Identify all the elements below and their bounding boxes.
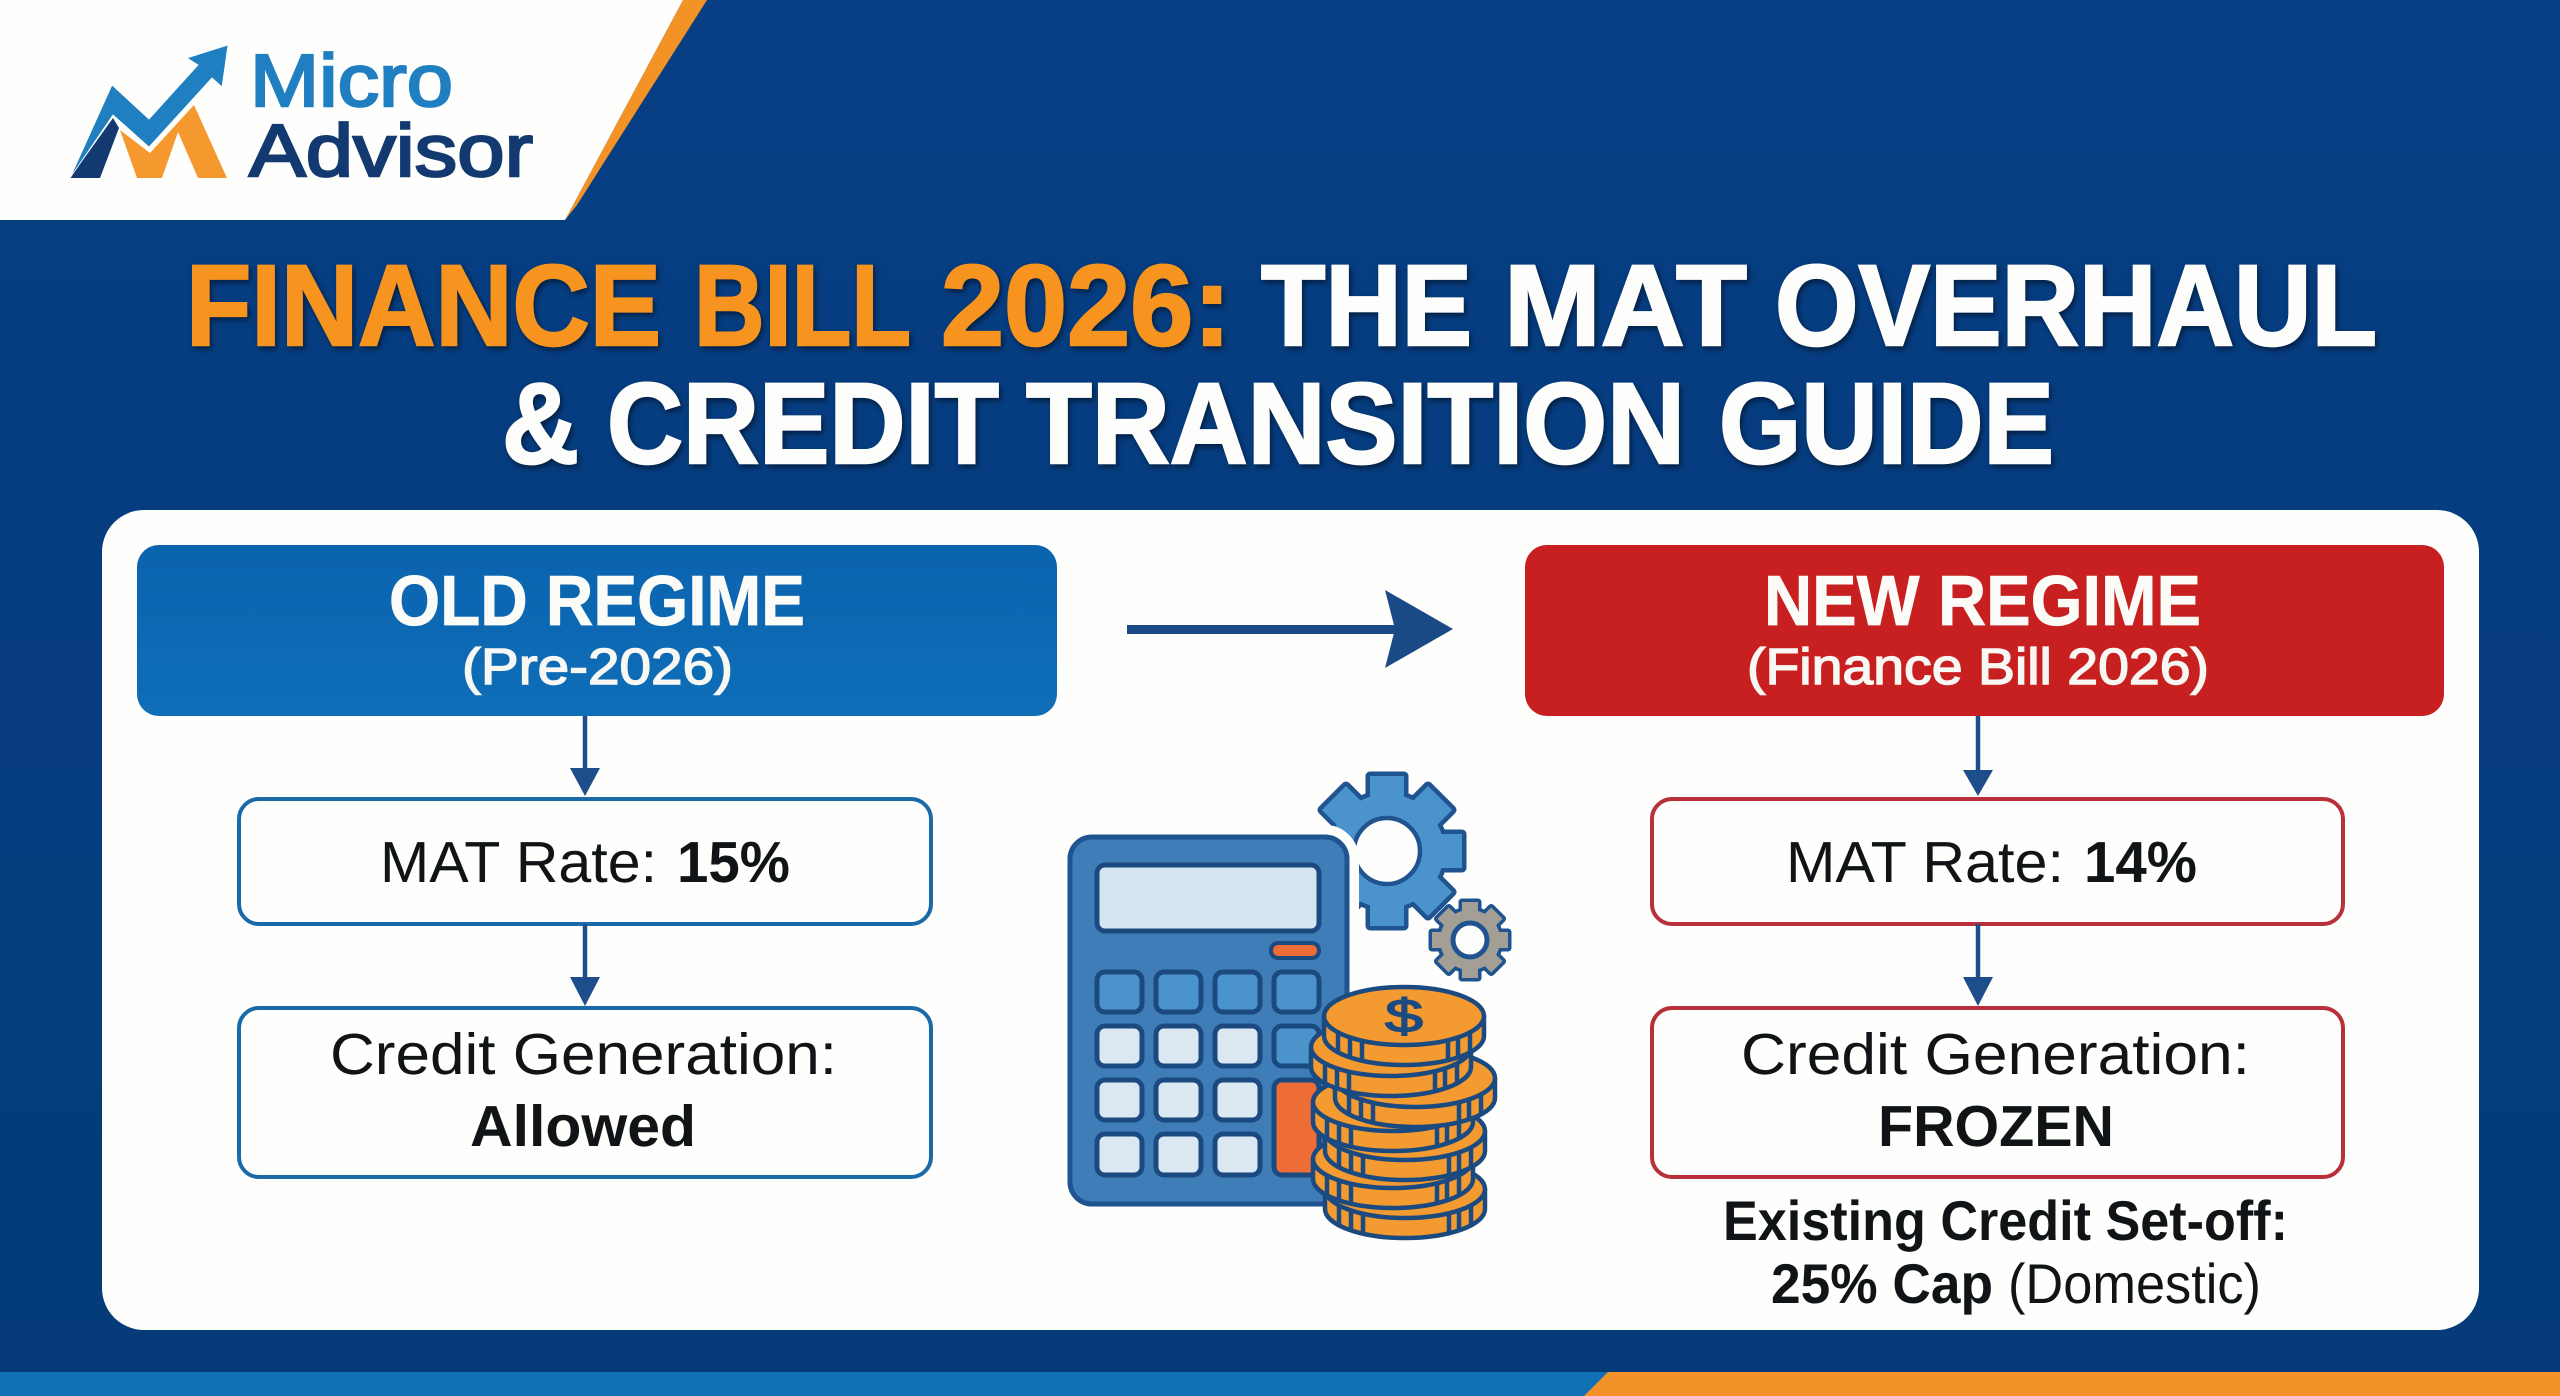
existing credit set-off note: (Domestic) — [2008, 1252, 2261, 1315]
existing credit set-off note: 25% Cap — [1771, 1252, 1993, 1315]
arrow: old regime to new regime — [1127, 590, 1453, 668]
credit generation box — [1652, 1008, 2343, 1177]
new regime header — [1525, 545, 2444, 716]
credit generation box: Credit Generation: — [330, 1022, 837, 1087]
logo text: Advisor — [249, 109, 533, 192]
new regime header: (Finance Bill 2026) — [1747, 638, 2209, 695]
old regime header — [137, 545, 1057, 716]
credit generation box: Allowed — [470, 1094, 696, 1159]
arrow: MAT rate to credit generation — [1963, 924, 1993, 1006]
logo banner — [0, 0, 707, 220]
credit generation box: FROZEN — [1878, 1094, 2114, 1159]
icon: coin stack: $ — [1385, 989, 1423, 1042]
footer band — [0, 1372, 2560, 1396]
title — [186, 242, 2377, 488]
arrow: header to MAT rate — [570, 716, 600, 796]
MAT rate box: 14% — [2084, 830, 2197, 895]
title: THE — [1261, 242, 1472, 370]
logo text — [249, 39, 533, 192]
title: & — [502, 360, 579, 488]
icon: coin stack — [1311, 987, 1495, 1238]
existing credit set-off note: Existing Credit Set-off: — [1723, 1189, 2288, 1252]
title: MAT — [1504, 242, 1747, 370]
title: GUIDE — [1719, 360, 2054, 488]
icon: calculator, gears and coins — [1070, 776, 1508, 1238]
new regime header: NEW REGIME — [1764, 562, 2201, 641]
MAT rate box — [1652, 799, 2343, 924]
old regime header: (Pre-2026) — [462, 638, 733, 695]
icon: calculator — [1070, 837, 1347, 1204]
MAT rate box: MAT Rate: — [380, 830, 657, 895]
title: BILL — [694, 242, 911, 370]
icon: small gear — [1432, 902, 1508, 978]
MAT rate box: 15% — [677, 830, 790, 895]
logo mark — [70, 45, 228, 178]
panel: new regime — [1525, 545, 2444, 1315]
title: TRANSITION — [1026, 360, 1685, 488]
old regime header: OLD REGIME — [389, 562, 805, 641]
MAT rate box — [239, 799, 931, 924]
arrow: MAT rate to credit generation — [570, 924, 600, 1006]
title: 2026: — [941, 242, 1231, 370]
credit generation box: Credit Generation: — [1741, 1022, 2250, 1087]
arrow: header to MAT rate — [1963, 716, 1993, 796]
panel: comparison card — [102, 510, 2479, 1330]
icon: large gear — [1312, 776, 1462, 926]
title: OVERHAUL — [1775, 242, 2377, 370]
title: CREDIT — [607, 360, 999, 488]
panel: old regime — [137, 545, 1057, 1177]
logo text: Micro — [250, 39, 453, 122]
MAT rate box: MAT Rate: — [1786, 830, 2064, 895]
title: FINANCE — [186, 242, 661, 370]
existing credit set-off note — [1723, 1189, 2288, 1315]
credit generation box — [239, 1008, 931, 1177]
